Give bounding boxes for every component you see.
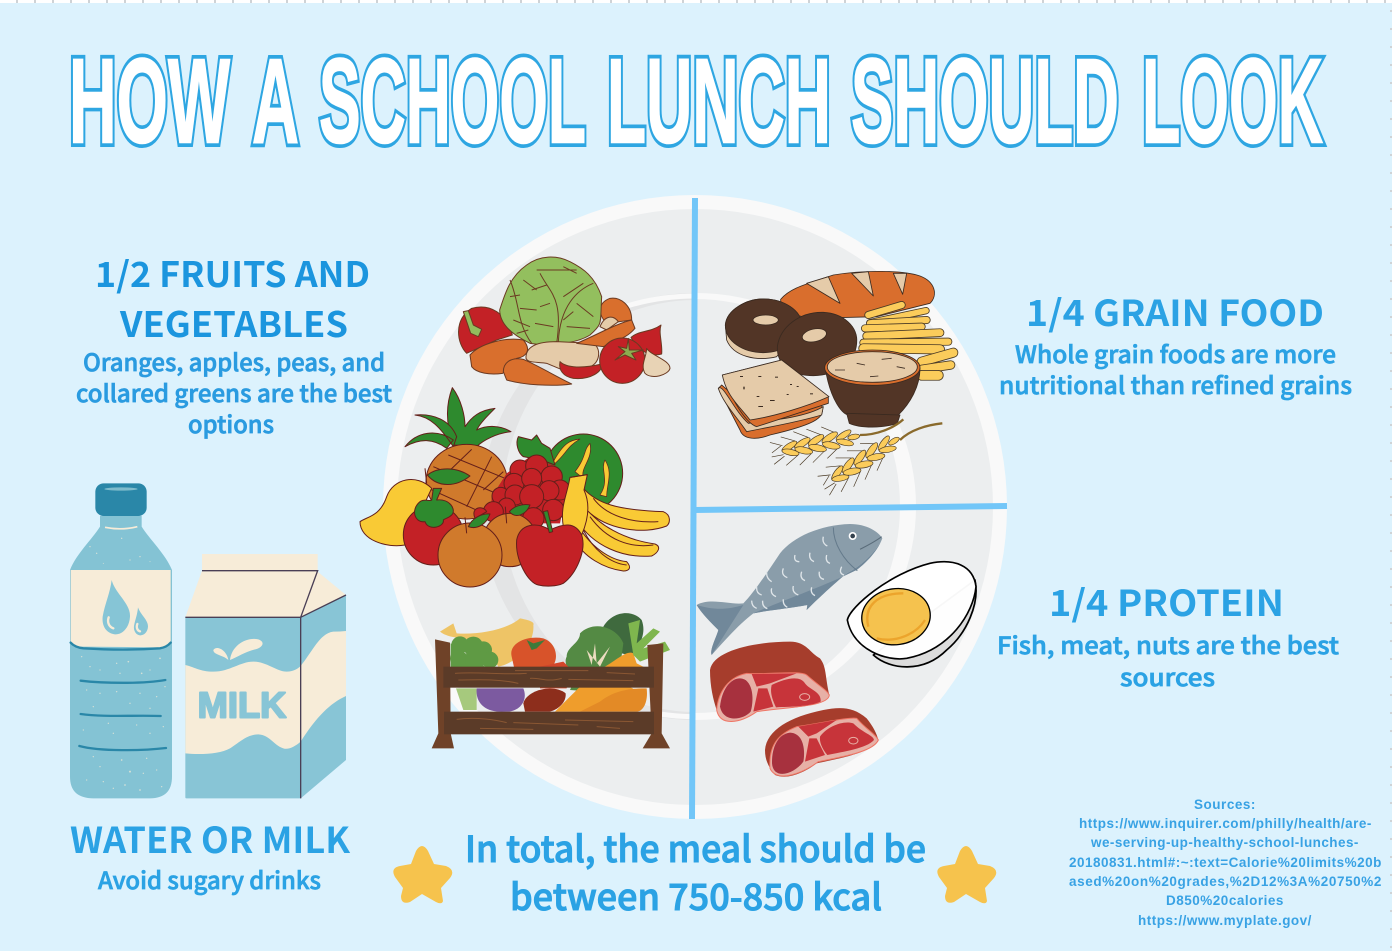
fish	[697, 524, 882, 655]
icon: fruits	[360, 388, 669, 587]
sources	[1069, 797, 1382, 928]
callout: total calories: between 750-850 kcal	[510, 869, 882, 921]
sources: 20180831.html#:~:text=Calorie%20limits%20b	[1069, 855, 1382, 870]
icon: vegetables	[459, 257, 670, 385]
text: fruits and vegetables: Oranges, apples, peas, and	[83, 343, 385, 378]
icon: water bottle	[70, 483, 172, 798]
heading: fruits and vegetables: 1/2 FRUITS AND	[95, 247, 370, 298]
title	[69, 32, 1323, 168]
icon: vegetable crate	[432, 613, 670, 748]
icon: milk carton	[185, 554, 346, 798]
text: protein: Fish, meat, nuts are the best	[997, 626, 1340, 661]
callout: total calories	[465, 821, 926, 921]
text: grain food	[999, 335, 1352, 401]
plate	[383, 195, 1007, 819]
title: SHOULD	[851, 32, 1119, 168]
sources: https://www.inquirer.com/philly/health/are-	[1079, 816, 1372, 831]
text: grain food: nutritional than refined grains	[999, 366, 1352, 401]
sources: https://www.myplate.gov/	[1138, 913, 1312, 928]
heading: water or milk: WATER OR MILK	[70, 812, 350, 864]
sources: D850%20calories	[1166, 893, 1284, 908]
sources: ased%20on%20grades,%2D12%3A%20750%2	[1069, 874, 1382, 889]
title: A	[252, 32, 299, 168]
egg	[847, 562, 976, 667]
title: LUNCH	[607, 32, 831, 168]
icon: right star	[937, 846, 996, 903]
text: fruits and vegetables: options	[188, 405, 274, 440]
title: LUNCH	[607, 32, 831, 168]
text: protein	[997, 626, 1340, 693]
title: SCHOOL	[319, 32, 586, 168]
icon: protein foods	[697, 524, 976, 777]
icon: milk carton: MILK	[198, 685, 286, 726]
title: SCHOOL	[319, 32, 586, 168]
heading: grain food: 1/4 GRAIN FOOD	[1026, 285, 1324, 337]
icon: grains	[718, 271, 953, 501]
sources: we-serving-up-healthy-school-lunches-	[1090, 835, 1359, 850]
callout: total calories: In total, the meal should be	[465, 821, 926, 873]
text: avoid sugary drinks: Avoid sugary drinks	[98, 861, 321, 896]
text: grain food: Whole grain foods are more	[1015, 335, 1336, 370]
heading: fruits and vegetables: VEGETABLES	[119, 297, 348, 348]
heading: protein: 1/4 PROTEIN	[1049, 575, 1284, 627]
icon: left star	[393, 846, 452, 903]
heading: fruits and vegetables	[95, 247, 370, 348]
title: HOW	[69, 32, 230, 168]
title: HOW	[69, 32, 230, 168]
title: SHOULD	[851, 32, 1119, 168]
title: A	[252, 32, 299, 168]
steak 2	[765, 708, 878, 777]
text: fruits and vegetables	[76, 343, 392, 440]
text: protein: sources	[1120, 658, 1215, 693]
sources: Sources:	[1194, 797, 1256, 812]
text: fruits and vegetables: collared greens are the best	[76, 374, 392, 409]
steak	[710, 642, 829, 721]
